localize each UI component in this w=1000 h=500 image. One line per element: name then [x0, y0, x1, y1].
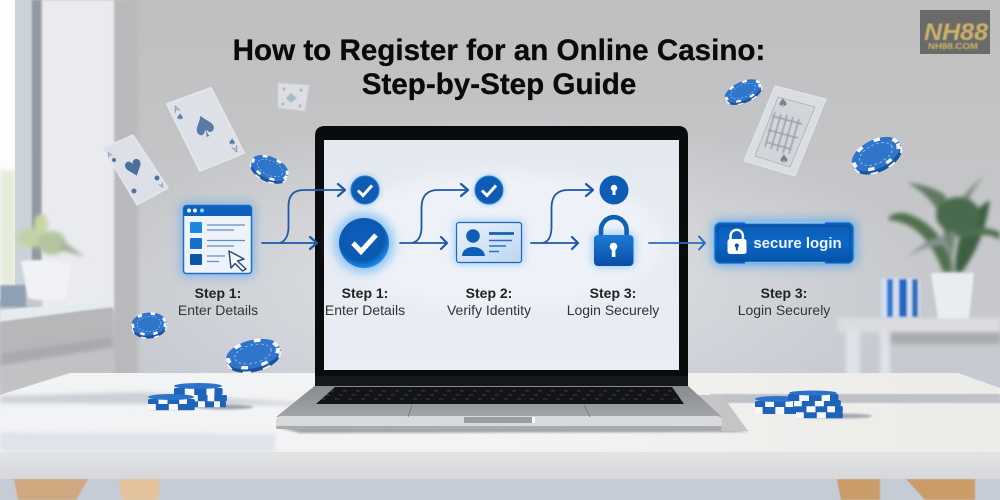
poker chip left large [223, 334, 284, 378]
blurred plant [888, 175, 1000, 272]
laptop step captions: Login Securely [567, 302, 659, 318]
right step caption [738, 285, 830, 318]
large check badge [334, 213, 394, 273]
arrow: step 2 to step 3 [531, 184, 593, 249]
left step caption: Step 1: [195, 285, 241, 301]
blurred plant on window sill [17, 214, 85, 300]
left step caption: Enter Details [178, 302, 258, 318]
secure login button [712, 219, 857, 267]
laptop shadow [280, 428, 750, 433]
blurred pot [931, 273, 974, 319]
floating card: ace of spades: A [172, 103, 181, 115]
laptop step captions: Verify Identity [447, 302, 531, 318]
title: Step-by-Step Guide [362, 68, 636, 101]
laptop base [276, 384, 722, 417]
window sill [0, 301, 113, 396]
laptop step captions: Step 2: [466, 285, 512, 301]
large padlock icon [592, 217, 636, 268]
poker chip top right small [721, 74, 766, 110]
trackpad edges [408, 405, 590, 417]
title: How to Register for an Online Casino: [233, 34, 765, 67]
small check badge 2 [474, 174, 504, 206]
poker chip left small [130, 311, 168, 340]
arrow: laptop to secure login [649, 236, 705, 250]
desk [0, 373, 1000, 500]
floating card: ace of hearts: A [106, 151, 114, 159]
chip stacks left [148, 383, 253, 410]
shelf [838, 318, 1000, 376]
right step caption: Login Securely [738, 302, 830, 318]
screen bezel [315, 126, 688, 385]
desk legs [14, 479, 975, 500]
blurred chip stack [881, 278, 920, 318]
floating card: ace of spades: ♠ [228, 138, 236, 148]
laptop step captions: Enter Details [325, 302, 405, 318]
floating card: ace of hearts [103, 135, 168, 205]
step icon: registration form window [180, 202, 255, 277]
title [233, 34, 765, 101]
floating card: ace of spades [167, 88, 244, 171]
screen [324, 140, 679, 370]
poker chip near left card [246, 150, 293, 189]
floating card: jack of spades [744, 86, 826, 176]
keyboard [316, 387, 684, 404]
floating card: ace of spades: A [231, 143, 240, 155]
logo badge: NH88 [924, 19, 989, 46]
secure login button: secure login [753, 235, 842, 252]
arrow: step 1 to step 2 [400, 184, 468, 249]
poker chip top right large [846, 130, 907, 182]
floating card: ace of spades: ♠ [186, 106, 223, 149]
small check badge 1 [350, 174, 380, 206]
floating card: jack of spades: ♠ [779, 152, 789, 166]
small lock badge [600, 176, 628, 204]
floating card: ace of spades: ♠ [176, 113, 184, 123]
floating small faded card [278, 83, 309, 111]
laptop [276, 126, 750, 433]
laptop step captions: Step 3: [590, 285, 636, 301]
floating card: ace of hearts: A [157, 181, 165, 189]
floating card: jack of spades: ♠ [778, 96, 788, 110]
logo badge [920, 10, 990, 54]
logo badge: NH88.COM [928, 42, 978, 51]
laptop step captions: Step 1: [342, 285, 388, 301]
floating card: ace of hearts: ♥ [121, 154, 148, 185]
laptop step captions [325, 285, 659, 318]
right step caption: Step 3: [761, 285, 807, 301]
ID card icon [454, 220, 524, 265]
left step caption [178, 285, 258, 318]
blurred shelf, plant and chips on right [838, 175, 1000, 376]
arrow: form to laptop [262, 184, 345, 249]
chip stacks right [755, 390, 872, 418]
